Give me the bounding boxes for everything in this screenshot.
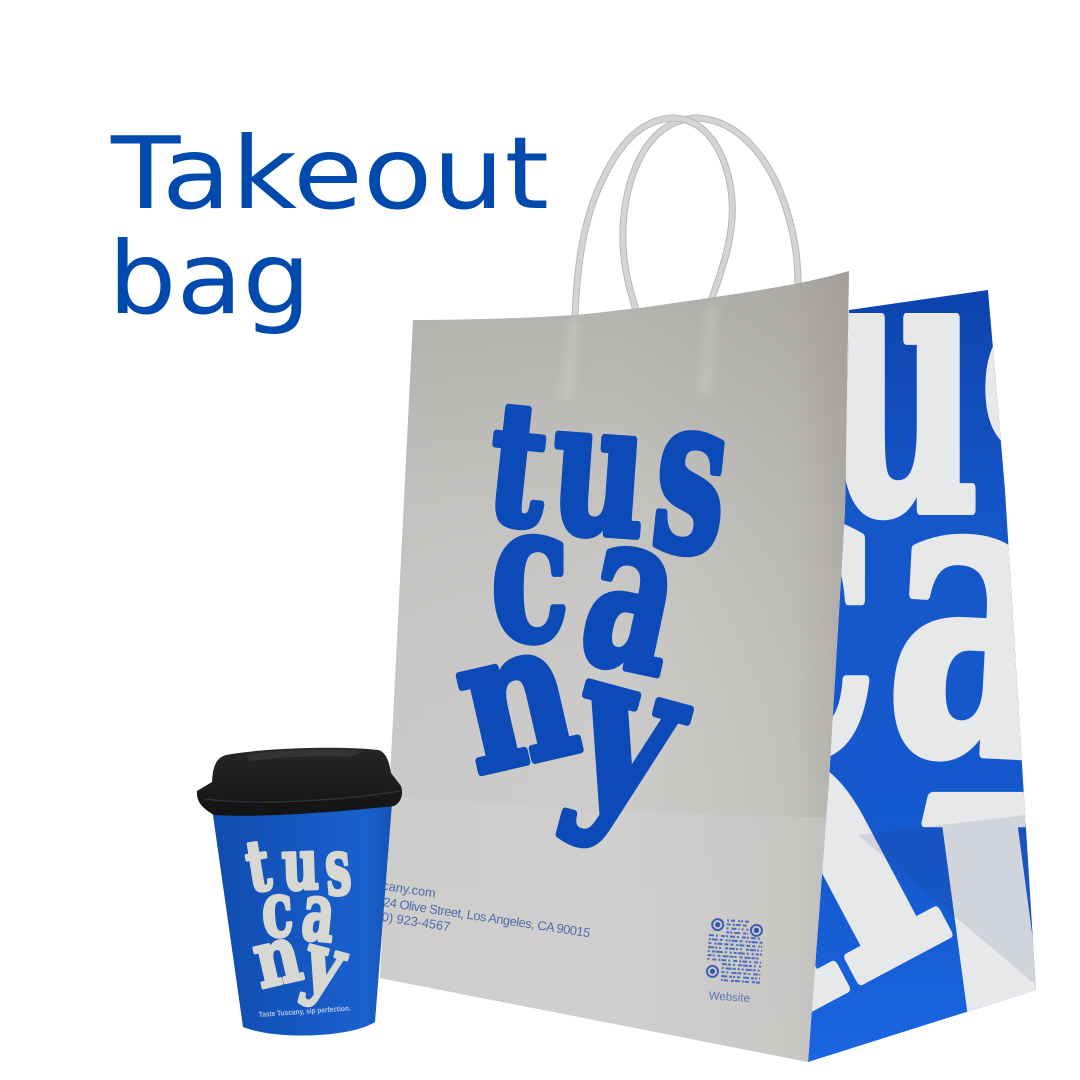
bag contact details: (800) 923-4567 bbox=[363, 906, 451, 934]
bag logo: a bbox=[564, 457, 703, 726]
bag handles bbox=[575, 118, 798, 315]
cup logo bbox=[240, 821, 357, 1014]
bag logo bbox=[436, 344, 741, 866]
qr code bbox=[704, 919, 764, 1006]
side panel oversized letters: c bbox=[721, 346, 878, 852]
bag side panel bbox=[808, 290, 1036, 1062]
coffee cup bbox=[197, 748, 402, 1036]
bag logo: s bbox=[643, 344, 741, 606]
cup logo: a bbox=[298, 864, 340, 961]
cup lid bbox=[197, 748, 402, 816]
title: bag bbox=[108, 220, 311, 337]
bag contact details bbox=[363, 875, 591, 940]
bag contact details: 124 Olive Street, Los Angeles, CA 90015 bbox=[376, 893, 591, 940]
bag front panel bbox=[363, 271, 849, 1062]
bag logo: u bbox=[545, 359, 654, 580]
cup tagline: Taste Tuscany, sip perfection. bbox=[259, 1004, 351, 1019]
title: Takeout bbox=[110, 115, 549, 232]
cup logo: t bbox=[240, 825, 276, 909]
cup logo: s bbox=[321, 821, 354, 915]
bag logo: c bbox=[491, 462, 569, 685]
cup logo: u bbox=[280, 824, 320, 907]
website label: Website bbox=[708, 990, 750, 1005]
bag logo: n bbox=[436, 574, 594, 818]
side panel oversized letters: a bbox=[878, 373, 1073, 851]
side panel oversized letters: u bbox=[824, 164, 980, 598]
bag lower fold bbox=[796, 817, 826, 1062]
takeout bag bbox=[363, 118, 1080, 1080]
side panel oversized letters bbox=[812, 313, 1036, 1012]
cup logo: y bbox=[294, 913, 357, 1014]
cup logo: n bbox=[244, 907, 309, 1006]
bag contact details: tuscany.com bbox=[365, 875, 437, 901]
title bbox=[108, 115, 549, 337]
cup logo: c bbox=[259, 865, 296, 956]
cup body bbox=[212, 803, 392, 1036]
bag logo: y bbox=[546, 595, 715, 866]
side panel fold shadow bbox=[858, 815, 1036, 985]
bag logo: t bbox=[480, 364, 556, 566]
